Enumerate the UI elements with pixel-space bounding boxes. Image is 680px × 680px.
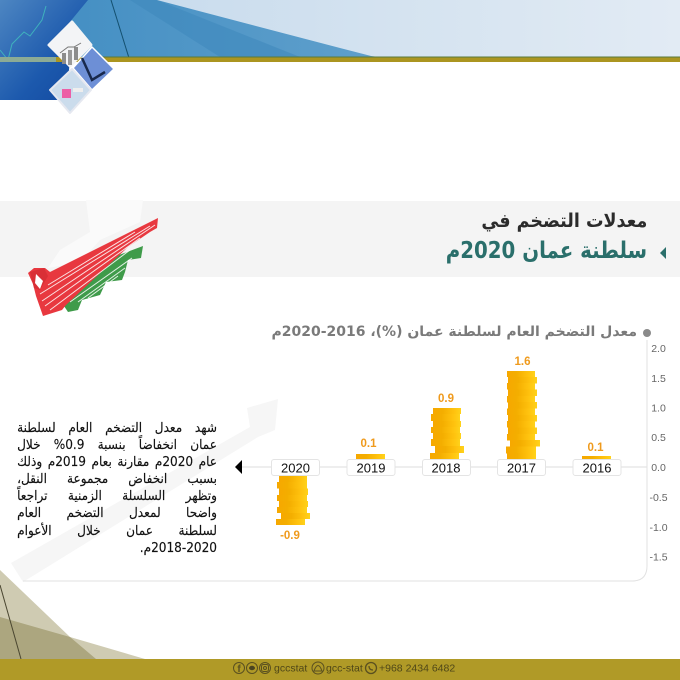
- footer text: +968 2434 6482: [379, 662, 455, 674]
- y-axis labels: 0.0: [651, 462, 666, 474]
- bar 2016: [582, 456, 611, 459]
- icon: diamond tiles: [49, 22, 114, 113]
- icon: facebook: f: [237, 664, 241, 675]
- zero axis line: [240, 466, 647, 468]
- body paragraph: واضحا لمعدل التضخم العام: [17, 506, 217, 521]
- axis arrowhead: [235, 460, 242, 474]
- value labels: [280, 356, 604, 542]
- y-axis labels: 1.0: [651, 402, 666, 414]
- chart bullet: [643, 329, 651, 337]
- title line 1: معدلات التضخم في: [481, 210, 647, 232]
- icon: instagram: [260, 662, 270, 674]
- value labels: -0.9: [280, 530, 300, 542]
- y-axis labels: 1.5: [651, 373, 666, 385]
- icon: snapchat: [312, 662, 324, 674]
- body paragraph: لسلطنة عمان خلال الأعوام: [17, 524, 217, 539]
- value labels: 0.1: [588, 442, 604, 454]
- value labels: 1.6: [514, 356, 530, 368]
- body paragraph: بسبب انخفاض مجموعة النقل،: [17, 472, 217, 487]
- bar 2018: [430, 408, 464, 459]
- y-axis labels: -1.5: [649, 552, 668, 564]
- icon: whatsapp: [366, 662, 376, 674]
- header banner: [0, 0, 680, 114]
- y-axis labels: 0.5: [651, 432, 666, 444]
- title marker triangle: [660, 247, 666, 259]
- y-axis labels: 2.0: [651, 343, 666, 355]
- title line 2: سلطنة عمان 2020م: [446, 238, 647, 264]
- body paragraph: [16, 421, 217, 556]
- icon: twitter: [246, 662, 258, 674]
- footer text: gccstat: [274, 662, 307, 674]
- bar 2020: [276, 476, 310, 525]
- year labels: 2020: [281, 460, 310, 476]
- value labels: 0.9: [438, 393, 454, 405]
- y-axis labels: [649, 343, 668, 564]
- year labels: 2016: [583, 460, 611, 476]
- icon: Oman map in flag colours: [28, 218, 158, 316]
- year labels: [272, 460, 621, 476]
- body paragraph: شهد معدل التضخم العام لسلطنة: [17, 421, 217, 436]
- year labels: 2018: [432, 460, 460, 476]
- chart heading: معدل التضخم العام لسلطنة عمان (%)، 2016-2020م: [271, 324, 637, 340]
- y-axis labels: -1.0: [649, 522, 668, 534]
- chart frame: [23, 340, 647, 581]
- body paragraph: وتظهر السلسلة الزمنية تراجعاً: [17, 489, 217, 504]
- bar 2019: [356, 454, 385, 459]
- body paragraph: عمان انخفاضاً بنسبة 0.9% خلال: [17, 438, 217, 453]
- value labels: 0.1: [360, 438, 377, 450]
- icon: facebook: [234, 662, 244, 675]
- y-axis labels: -0.5: [649, 492, 668, 504]
- year labels: 2017: [507, 460, 536, 476]
- body paragraph: عام 2020م مقارنة بعام 2019م وذلك: [17, 455, 217, 470]
- footer bar: [0, 659, 680, 680]
- bar 2017: [506, 371, 540, 459]
- title band: [0, 201, 680, 277]
- footer text: [274, 662, 455, 674]
- footer text: gcc-stat: [326, 662, 363, 674]
- year labels: 2019: [357, 460, 385, 476]
- body paragraph: 2018-2020م.: [140, 541, 217, 556]
